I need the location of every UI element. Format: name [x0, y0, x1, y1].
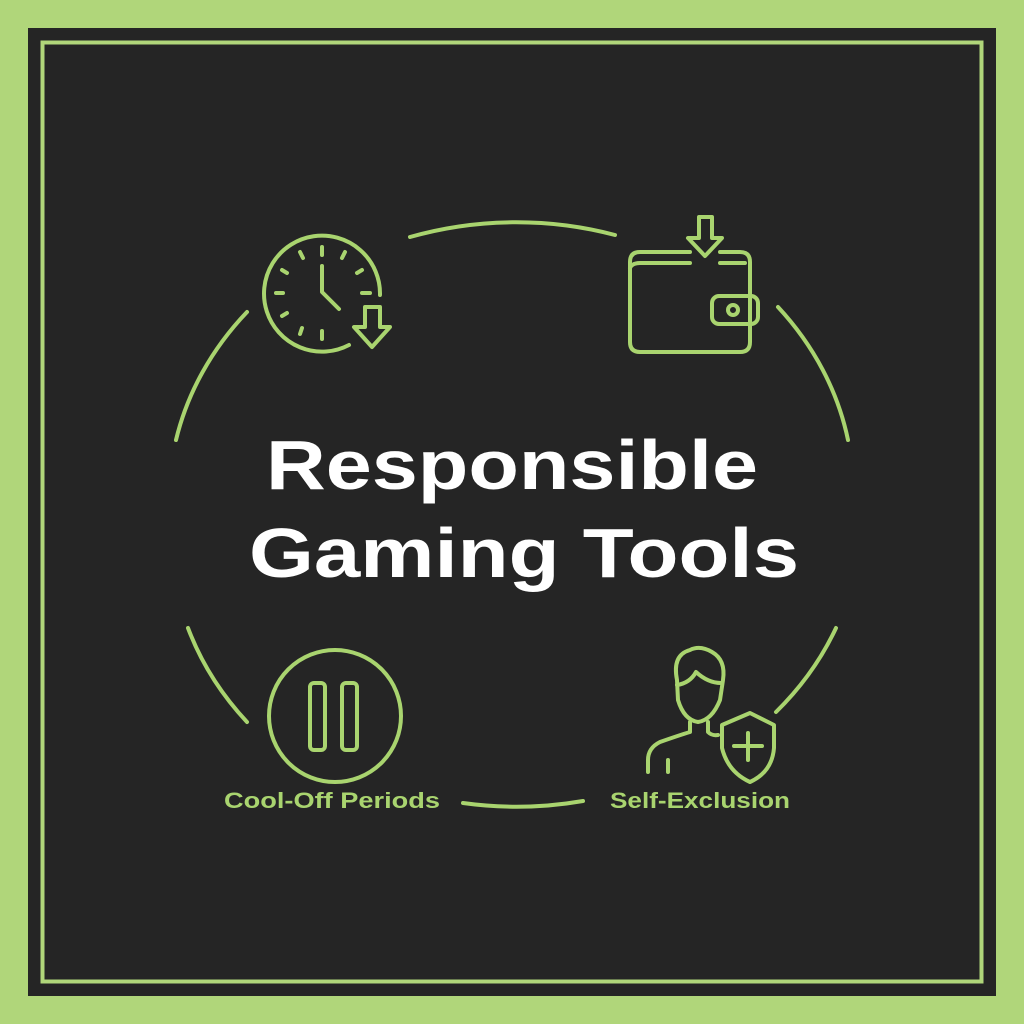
label: self-exclusion: Self-Exclusion: [610, 788, 790, 813]
title: [249, 426, 799, 592]
cycle arcs: [176, 222, 848, 807]
icon: pause: [269, 650, 401, 782]
icon: clock with down arrow: [264, 236, 390, 352]
label: cool-off periods: Cool-Off Periods: [224, 788, 440, 813]
icon: wallet with deposit arrow: [630, 217, 758, 352]
title: Responsible: [266, 426, 758, 504]
title: Gaming Tools: [249, 514, 799, 592]
icon: person with shield: [648, 648, 774, 782]
